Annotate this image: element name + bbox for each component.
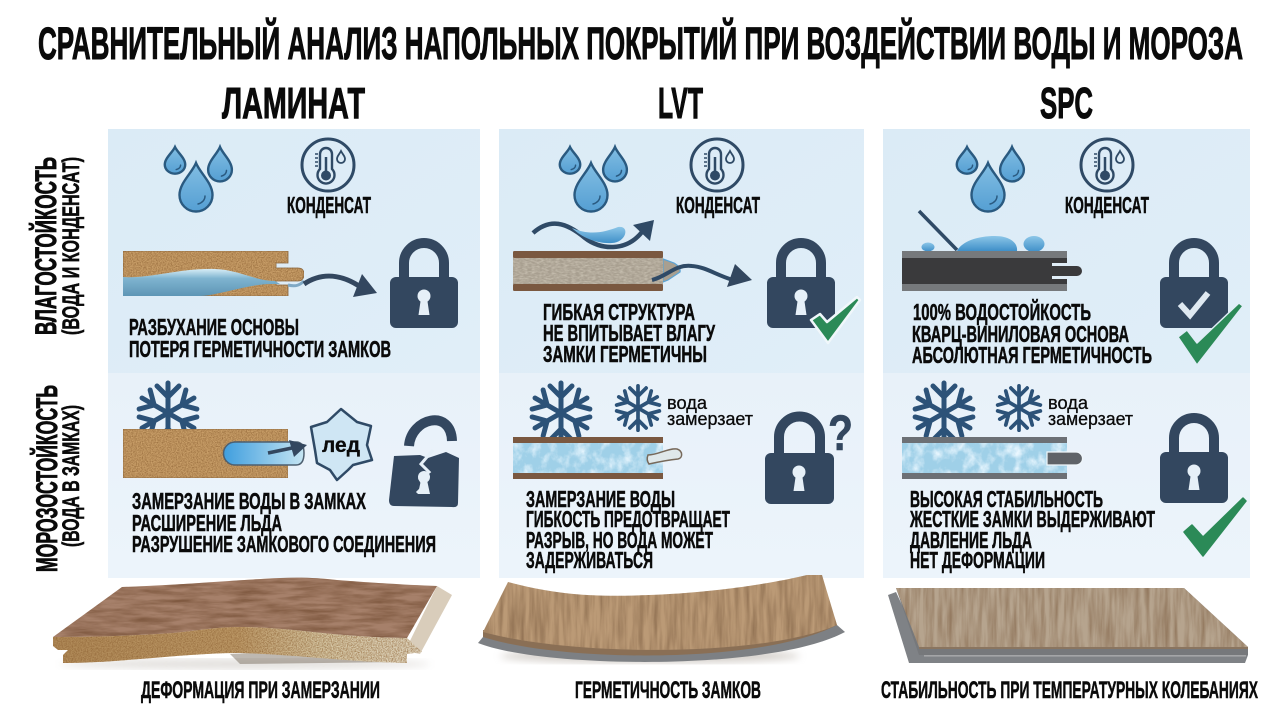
caption: LVT: ГЕРМЕТИЧНОСТЬ ЗАМКОВ [575,677,761,704]
diagram: SPC board with water beads [902,211,1082,291]
text: stability [909,486,1155,573]
label: water freezes [1048,393,1133,429]
column heading: SPC: SPC [1040,79,1093,128]
icon: condensation thermometer [691,139,743,191]
row label: moisture resistance [29,157,85,335]
text: stability: НЕТ ДЕФОРМАЦИИ [910,547,1045,573]
caption: laminate: ДЕФОРМАЦИЯ ПРИ ЗАМЕРЗАНИИ [141,677,380,704]
diagram: swollen laminate board [123,251,304,296]
row label: moisture resistance: (ВОДА И КОНДЕНСАТ) [58,157,85,335]
arrow: water to lock [652,264,752,287]
text: swelling [129,314,391,362]
plank: stable SPC [888,588,1248,663]
icon: lock with check [767,243,860,343]
text: freezing damage: РАЗРУШЕНИЕ ЗАМКОВОГО СОЕДИНЕНИЯ [132,531,436,557]
label: water freezes: вода [1048,393,1089,413]
text: freezing damage: ЗАМЕРЗАНИЕ ВОДЫ В ЗАМКАХ [132,488,366,514]
icon: lock [390,243,458,328]
diagram: LVT board with ice [513,437,682,479]
text: flexible structure: ЗАМКИ ГЕРМЕТИЧНЫ [543,341,707,367]
icon: water drops [165,147,232,212]
text: freezing damage [132,488,436,557]
text: waterproof: 100% ВОДОСТОЙКОСТЬ [913,298,1091,325]
text: flexibility: РАЗРЫВ, НО ВОДА МОЖЕТ [526,527,713,553]
arrow: water sliding over surface [533,220,654,247]
label: water freezes: вода [667,393,708,413]
column heading: laminate: ЛАМИНАТ [222,79,365,128]
text: stability: ВЫСОКАЯ СТАБИЛЬНОСТЬ [910,486,1103,512]
icon: snowflake small [615,386,661,430]
diagram: LVT board [513,251,680,291]
text: waterproof: КВАРЦ-ВИНИЛОВАЯ ОСНОВА [912,321,1129,347]
icon: lock [1160,418,1228,503]
icon: lock with question mark: ? [828,405,853,461]
icon: water drops [560,147,627,212]
row label: moisture resistance: ВЛАГОСТОЙКОСТЬ [29,157,63,335]
plank: bent LVT [478,575,845,663]
text: stability: ДАВЛЕНИЕ ЛЬДА [910,527,1032,553]
arrow: water to lock [288,274,377,297]
text: freezing damage: РАСШИРЕНИЕ ЛЬДА [132,510,282,536]
text: swelling: ПОТЕРЯ ГЕРМЕТИЧНОСТИ ЗАМКОВ [129,336,391,362]
icon: condensation thermometer [1081,139,1133,191]
label: water freezes [667,393,753,429]
label: water freezes: замерзает [667,409,753,429]
icon: condensation thermometer [302,139,354,191]
text: flexibility [526,486,730,573]
label: condensate: КОНДЕНСАТ [287,192,371,218]
icon: ice crystal [311,409,372,480]
icon: check mark [1184,498,1246,556]
text: flexible structure: ГИБКАЯ СТРУКТУРА [543,299,695,325]
label: water freezes: замерзает [1048,409,1133,429]
text: flexible structure [543,299,715,367]
row label: frost resistance: (ВОДА В ЗАМКАХ) [58,405,85,547]
icon: broken lock [389,420,459,507]
panel: LVT [499,129,864,578]
text: flexibility: ЗАМЕРЗАНИЕ ВОДЫ [526,486,675,512]
text: swelling: РАЗБУХАНИЕ ОСНОВЫ [129,314,299,340]
label: condensate: КОНДЕНСАТ [676,192,760,218]
text: flexibility: ЗАДЕРЖИВАТЬСЯ [526,547,653,573]
diagram: SPC board with ice [902,437,1082,479]
panel: laminate [108,129,480,578]
icon: snowflake large [530,383,592,443]
icon: snowflake large [913,383,975,443]
text: flexibility: ГИБКОСТЬ ПРЕДОТВРАЩАЕТ [526,506,730,532]
panel: SPC [883,129,1250,578]
icon: water drops [957,147,1024,212]
diagram: ice in laminate joint [123,429,307,478]
icon: snowflake [137,383,199,443]
text: flexible structure: НЕ ВПИТЫВАЕТ ВЛАГУ [543,320,715,346]
column heading: LVT: LVT [658,79,703,128]
text: waterproof [912,298,1152,368]
icon: snowflake small [996,386,1042,430]
icon: lock with check [1160,243,1243,365]
icon: lock with question mark [765,405,853,504]
row label: frost resistance: МОРОЗОСТОЙКОСТЬ [30,385,64,572]
icon: ice crystal: лед [322,434,360,457]
plank: deformed laminate [53,578,452,669]
label: condensate: КОНДЕНСАТ [1065,192,1149,218]
row label: frost resistance [30,385,85,572]
